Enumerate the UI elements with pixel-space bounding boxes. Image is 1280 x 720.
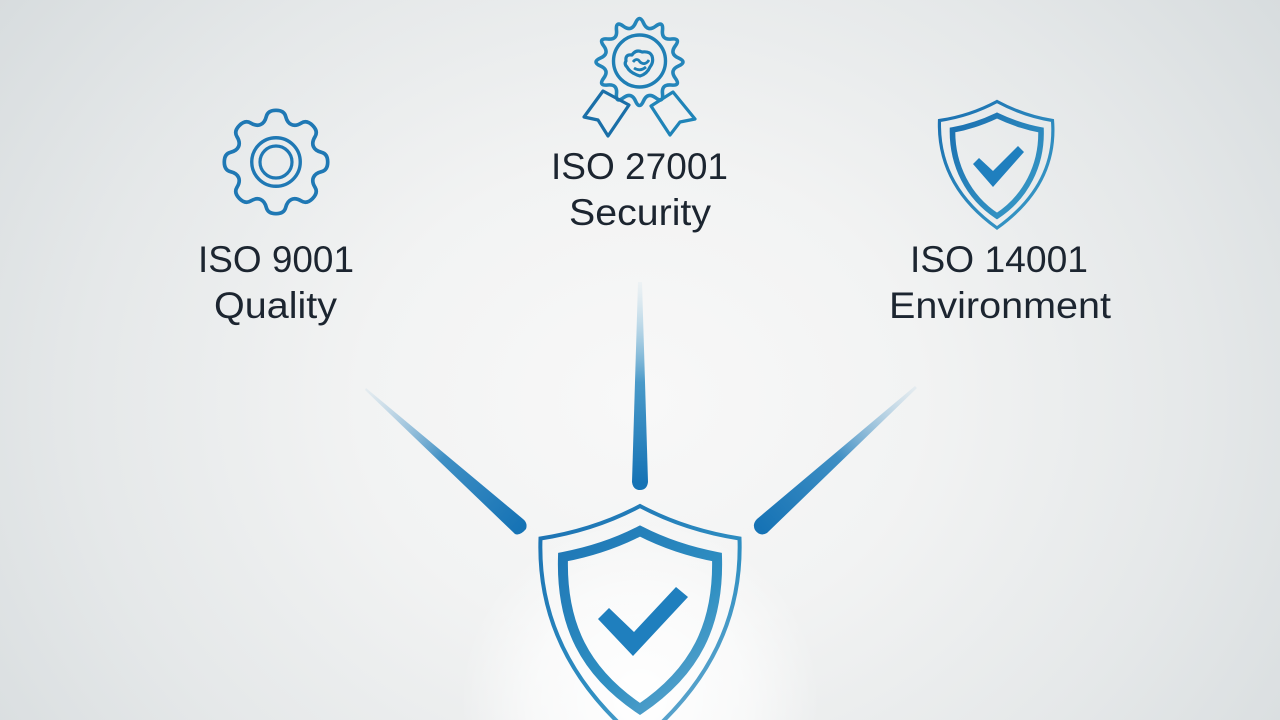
icon: right ribbon bbox=[651, 92, 695, 135]
label: ISO 9001 Quality bbox=[198, 239, 354, 326]
label: ISO 27001 Security bbox=[551, 146, 728, 233]
node: ISO 14001 Environment bbox=[889, 102, 1112, 326]
label: ISO 14001 Environment: Environment bbox=[889, 285, 1112, 326]
connector: ISO 14001 spoke bbox=[754, 386, 917, 534]
label: ISO 9001 Quality: Quality bbox=[214, 285, 338, 326]
label: ISO 14001 Environment bbox=[889, 239, 1112, 326]
icon: small shield with check bbox=[939, 102, 1053, 228]
node: ISO 27001 Security bbox=[551, 18, 728, 233]
icon: gear bbox=[224, 110, 328, 214]
label: ISO 27001 Security: ISO 27001 bbox=[551, 146, 728, 187]
node: ISO 9001 Quality bbox=[198, 110, 354, 326]
connector: ISO 9001 spoke bbox=[365, 388, 527, 534]
connector: ISO 27001 spoke bbox=[632, 282, 648, 490]
icon: award rosette bbox=[584, 18, 695, 136]
label: ISO 27001 Security: Security bbox=[569, 192, 712, 233]
icon: central shield with check bbox=[540, 506, 740, 720]
label: ISO 14001 Environment: ISO 14001 bbox=[910, 239, 1088, 280]
label: ISO 9001 Quality: ISO 9001 bbox=[198, 239, 354, 280]
icon: left ribbon bbox=[584, 91, 629, 136]
